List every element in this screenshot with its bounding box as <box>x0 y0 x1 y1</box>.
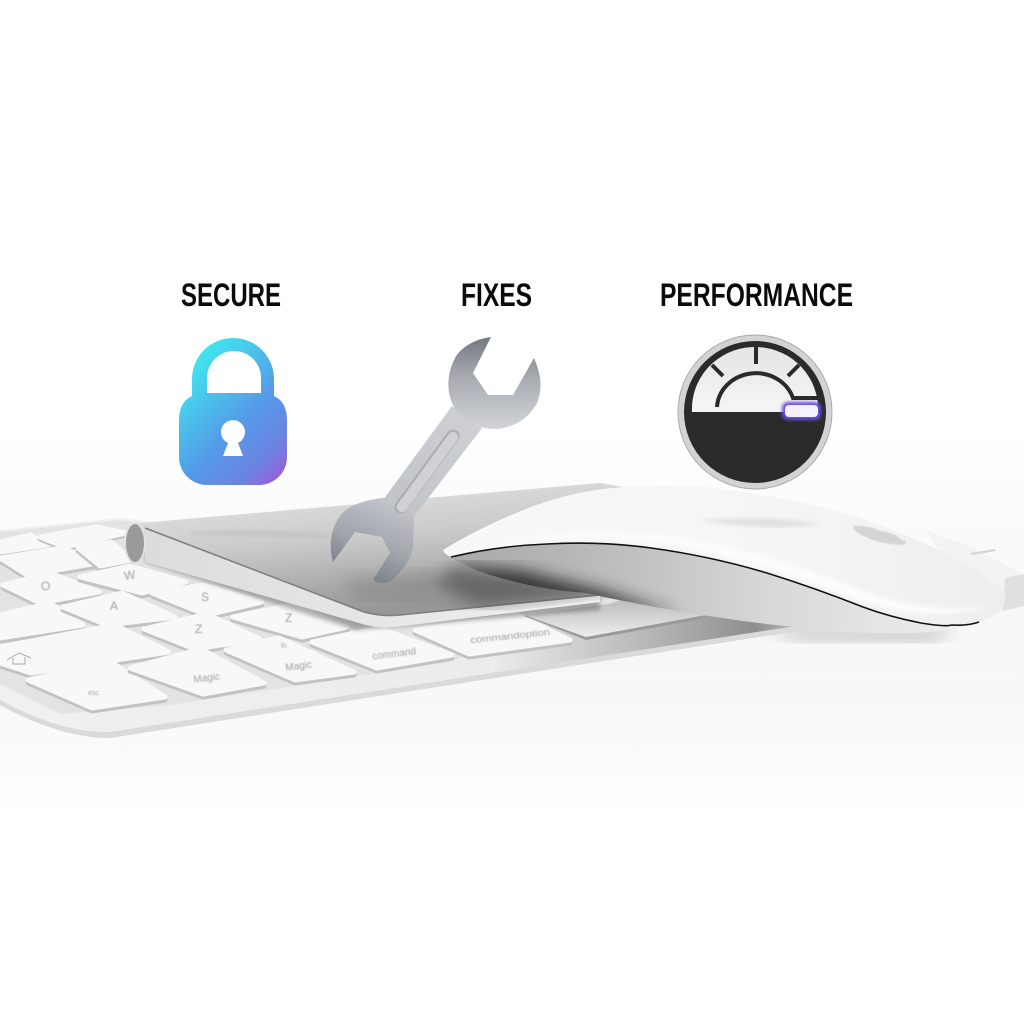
key: esc <box>28 662 165 711</box>
gauge dial <box>692 347 818 412</box>
key: Magic left <box>130 649 264 697</box>
key: esc: esc <box>88 690 99 697</box>
key: W: W <box>123 568 137 583</box>
key: blank <box>524 600 717 640</box>
key: second row right <box>78 542 132 569</box>
key: option: commandoption <box>470 627 550 645</box>
key: top row far left <box>0 535 48 555</box>
key: S <box>152 585 262 618</box>
trackpad soft highlight <box>190 531 330 538</box>
mouse <box>443 485 1005 633</box>
keyboard <box>0 518 1024 738</box>
icon: performance gauge <box>678 335 832 489</box>
mouse top shell <box>443 485 1005 626</box>
gauge indicator <box>785 405 818 417</box>
keyboard plate <box>0 518 820 738</box>
key: Magic right <box>226 638 354 683</box>
key: Z: Z <box>195 622 202 636</box>
key well shading <box>0 520 620 714</box>
wrench handle <box>372 406 482 540</box>
icon: padlock <box>179 338 287 485</box>
key: caps row <box>0 603 83 641</box>
ground shadow under mouse <box>760 628 960 642</box>
mouse black seam <box>451 543 979 626</box>
mouse top shading <box>700 518 820 527</box>
key: Z <box>144 614 260 652</box>
far right key highlight <box>970 549 996 555</box>
key: command <box>312 628 452 671</box>
gauge ticks <box>712 347 799 376</box>
trackpad side <box>145 528 600 627</box>
gauge indicator glow <box>782 402 821 420</box>
keyboard front edge <box>0 623 815 738</box>
trackpad <box>125 483 640 630</box>
wrench slot <box>401 436 453 507</box>
key: A: A <box>110 599 118 613</box>
heading: SECURE: SECURE <box>181 277 281 313</box>
heading: PERFORMANCE: PERFORMANCE <box>660 277 853 313</box>
gauge arc <box>717 373 819 407</box>
key: W <box>80 566 186 596</box>
wrench top head <box>448 337 541 429</box>
key: S: S <box>201 590 209 604</box>
keyboard right end <box>925 530 1024 612</box>
trackpad underside shadow <box>145 530 600 630</box>
key: O: O <box>40 579 51 594</box>
key: Magic right: fn <box>281 643 287 650</box>
key: Magic left: Magic <box>193 672 221 686</box>
wrench slot inner <box>402 437 453 507</box>
key: O <box>3 573 99 606</box>
key: shift <box>0 625 169 676</box>
key: command: command <box>372 646 417 663</box>
gauge face <box>684 341 826 483</box>
key: option <box>415 615 570 657</box>
trackpad cylinder end <box>125 523 145 563</box>
trackpad edge line <box>145 528 600 616</box>
key: X <box>233 605 347 640</box>
trackpad top surface <box>132 483 640 616</box>
key: second row <box>0 548 98 578</box>
key: X: Z <box>285 611 292 625</box>
key: Magic right: Magic <box>285 660 313 674</box>
shadow under mouse on trackpad <box>430 565 620 606</box>
gauge rim <box>678 335 832 489</box>
far right key side <box>1003 574 1024 611</box>
mouse underside dark shade <box>450 565 680 615</box>
heading: FIXES: FIXES <box>461 277 532 313</box>
key: A <box>63 593 175 628</box>
wrench bottom head <box>331 497 414 583</box>
mouse lower edge highlight <box>470 533 990 614</box>
key: top row second <box>40 527 126 549</box>
apple logo <box>853 526 906 545</box>
icon: wrench <box>331 337 541 583</box>
mouse underside <box>451 540 979 633</box>
scene illustration <box>0 283 1024 738</box>
wrench contact shadow <box>340 570 440 600</box>
